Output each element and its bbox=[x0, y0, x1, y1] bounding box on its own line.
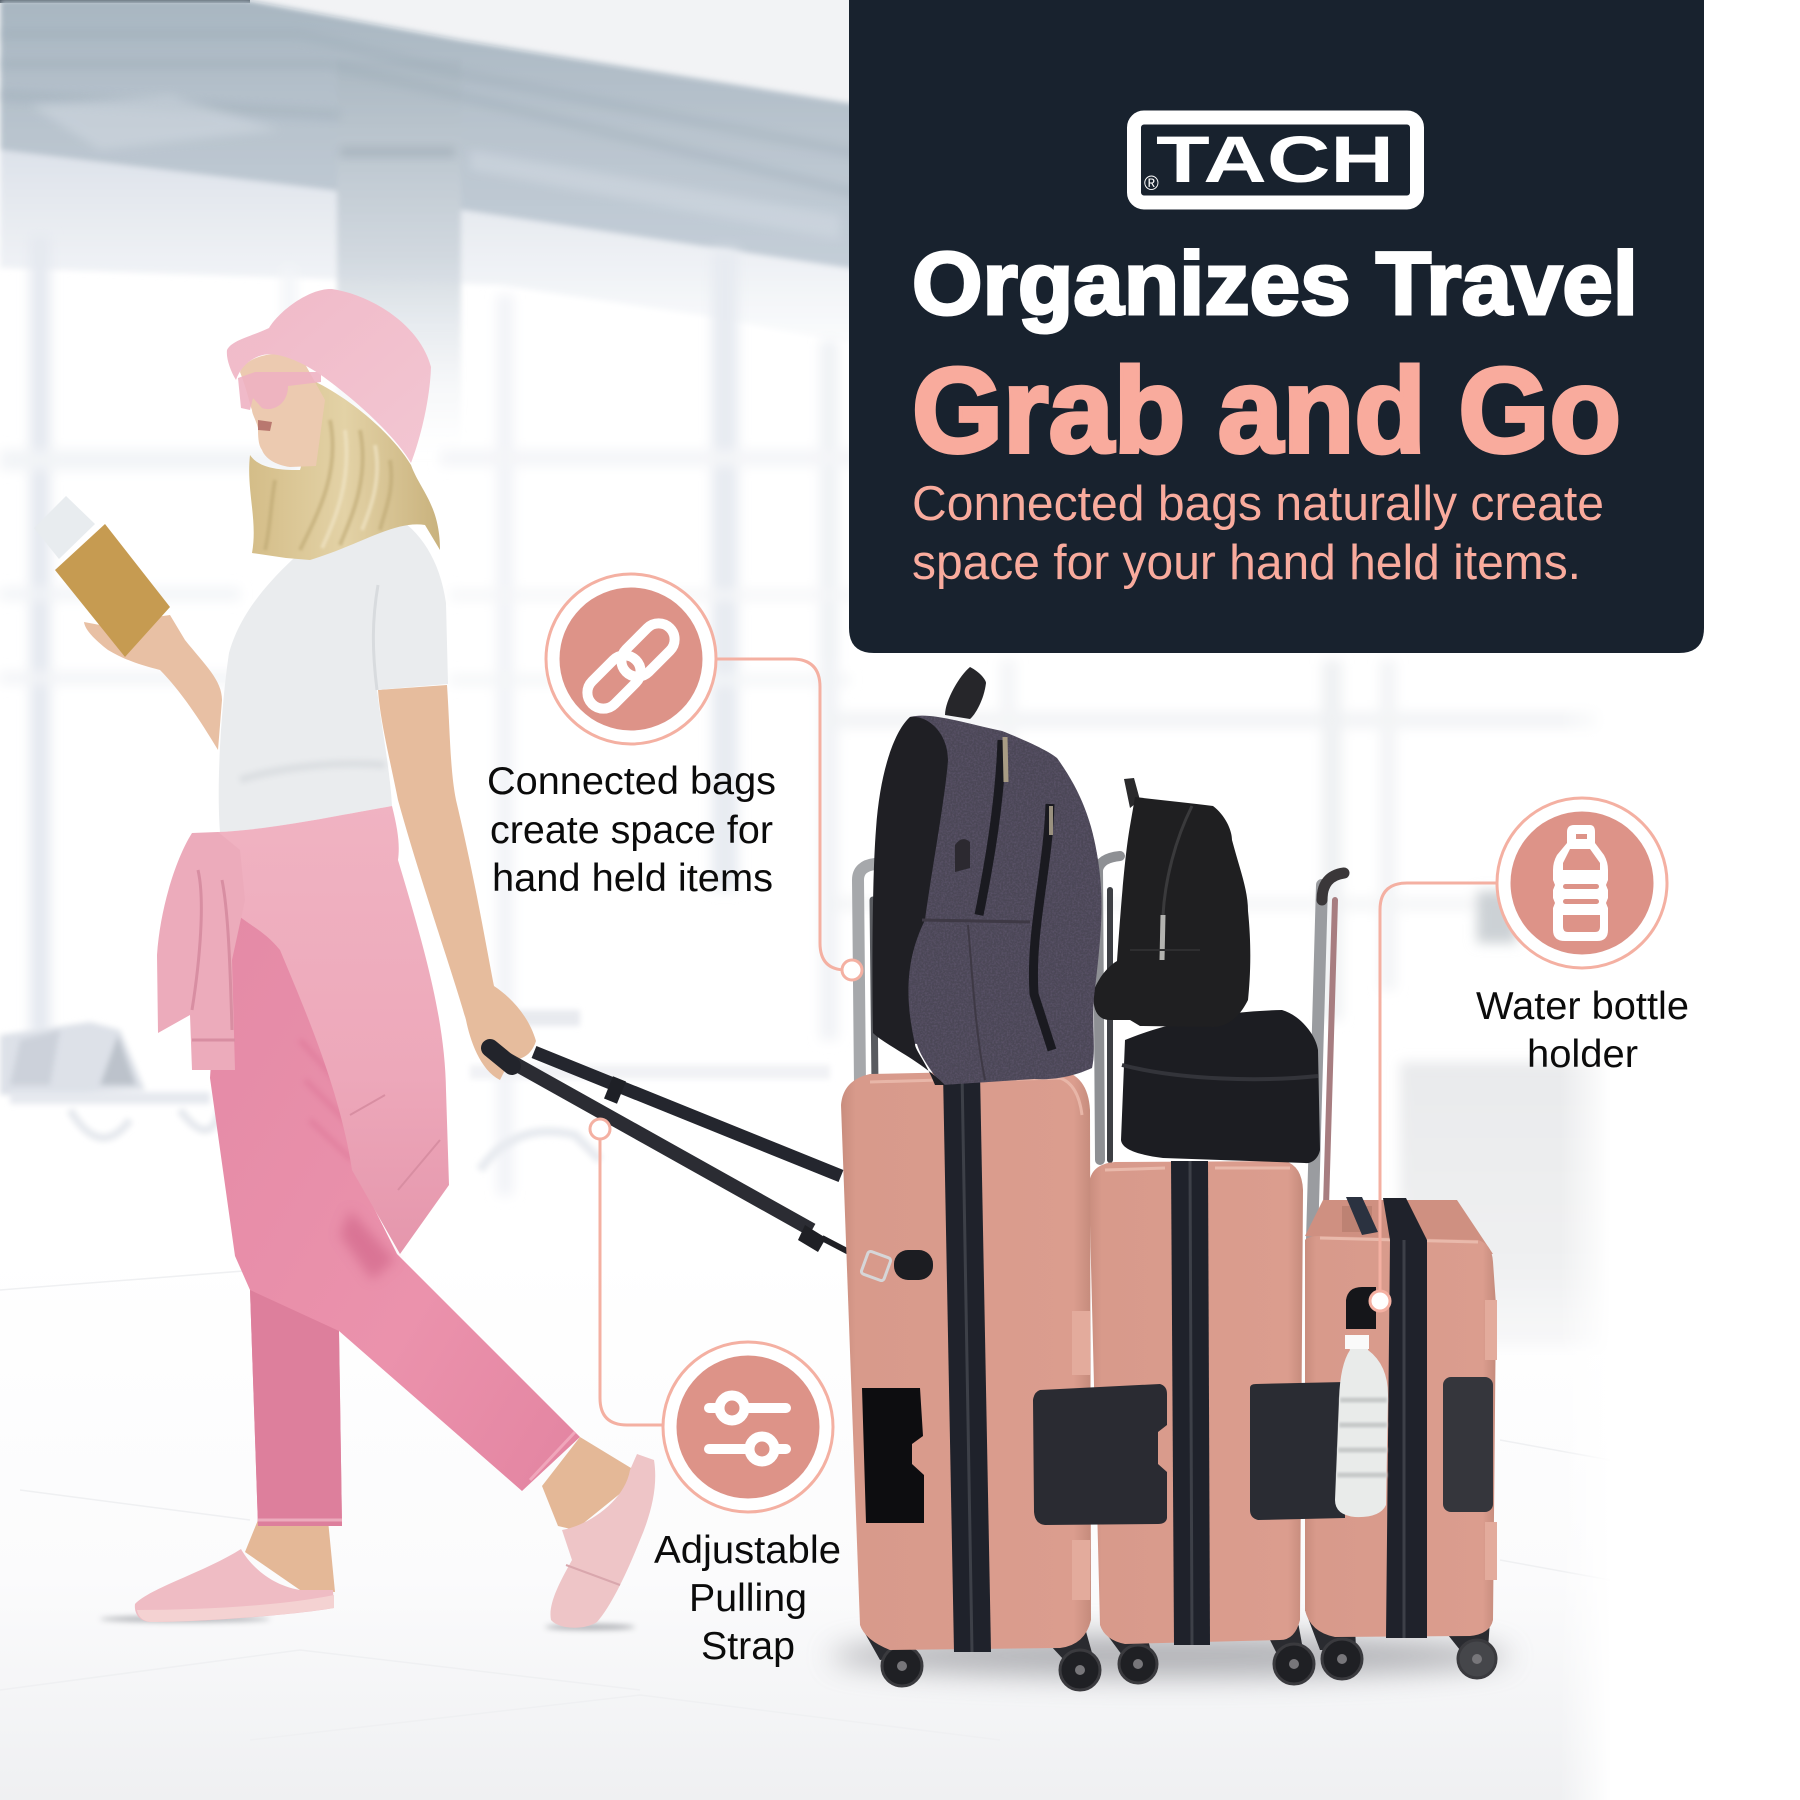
logo: TACH: TACH bbox=[1156, 122, 1394, 196]
large backpack bbox=[872, 667, 1101, 1085]
panel: headline bbox=[849, 0, 1704, 653]
callout: connected bags bbox=[487, 574, 776, 900]
connector plate bbox=[1250, 1382, 1345, 1520]
connector plate bbox=[862, 1388, 924, 1523]
label: water bottle holder bbox=[1476, 985, 1689, 1076]
connector plate between cases bbox=[1033, 1384, 1167, 1525]
bottle holder bbox=[1346, 1287, 1376, 1329]
raised arm bbox=[84, 615, 222, 750]
label: connected bags: hand held items bbox=[492, 857, 773, 900]
callout connector: water bottle bbox=[1380, 883, 1497, 1291]
jeans bbox=[210, 917, 580, 1526]
callout dot: water bottle bbox=[1370, 1291, 1390, 1311]
wheels bbox=[862, 1610, 1496, 1690]
ankles bbox=[245, 1437, 637, 1592]
strap mount bbox=[861, 1250, 933, 1281]
woman walking bbox=[34, 289, 655, 1630]
callout dot: connected bags bbox=[842, 960, 862, 980]
sweater tied at waist bbox=[218, 806, 449, 1254]
shoe shadows bbox=[100, 1616, 635, 1630]
label: adjustable strap bbox=[654, 1529, 841, 1668]
label: adjustable strap: Adjustable bbox=[654, 1529, 841, 1572]
logo: TACH: ® bbox=[1144, 173, 1159, 195]
heading: Organizes Travel: Organizes Travel bbox=[912, 233, 1638, 333]
icon: chain link bbox=[581, 617, 681, 715]
label: connected bags: Connected bags bbox=[487, 760, 776, 803]
bucket hat bbox=[227, 289, 431, 463]
label: connected bags bbox=[487, 760, 776, 900]
water bottle bbox=[1335, 1335, 1388, 1517]
front shoe bbox=[550, 1454, 655, 1628]
callout: water bottle holder bbox=[1476, 798, 1689, 1076]
label: water bottle holder: holder bbox=[1527, 1033, 1638, 1076]
small backpack bbox=[1093, 778, 1250, 1027]
passport bbox=[55, 524, 170, 657]
small suitcase bbox=[1305, 1197, 1497, 1638]
large suitcase bbox=[841, 1070, 1091, 1652]
callout connector: strap bbox=[600, 1135, 663, 1425]
telescopic handles bbox=[858, 856, 1344, 1240]
connector plate bbox=[1443, 1377, 1493, 1512]
back shoe bbox=[135, 1549, 334, 1622]
label: connected bags: create space for bbox=[490, 809, 773, 852]
label: water bottle holder: Water bottle bbox=[1476, 985, 1689, 1028]
pulling strap bbox=[490, 1048, 868, 1262]
callout: adjustable strap bbox=[654, 1342, 841, 1668]
boarding pass bbox=[34, 496, 95, 559]
heading: Grab and Go: Grab and Go bbox=[912, 342, 1621, 478]
sunglasses bbox=[238, 372, 321, 410]
label: adjustable strap: Pulling bbox=[689, 1577, 807, 1620]
subheading bbox=[912, 477, 1604, 590]
logo: TACH bbox=[1134, 118, 1417, 202]
callout dot: strap bbox=[590, 1119, 610, 1139]
right arm bbox=[378, 685, 536, 1080]
callout connector: connected bags bbox=[717, 659, 846, 970]
face bbox=[240, 354, 325, 467]
black travel case bbox=[1121, 1010, 1320, 1163]
hair bbox=[249, 375, 440, 560]
icon: sliders bbox=[709, 1396, 786, 1462]
icon: water bottle bbox=[1553, 825, 1608, 941]
subheading: Connected bags naturally create bbox=[912, 477, 1604, 531]
medium suitcase bbox=[1089, 1161, 1345, 1645]
label: adjustable strap: Strap bbox=[701, 1625, 795, 1668]
t-shirt bbox=[219, 515, 448, 832]
floor shadow under luggage bbox=[830, 1634, 1510, 1678]
subheading: space for your hand held items. bbox=[912, 536, 1581, 590]
